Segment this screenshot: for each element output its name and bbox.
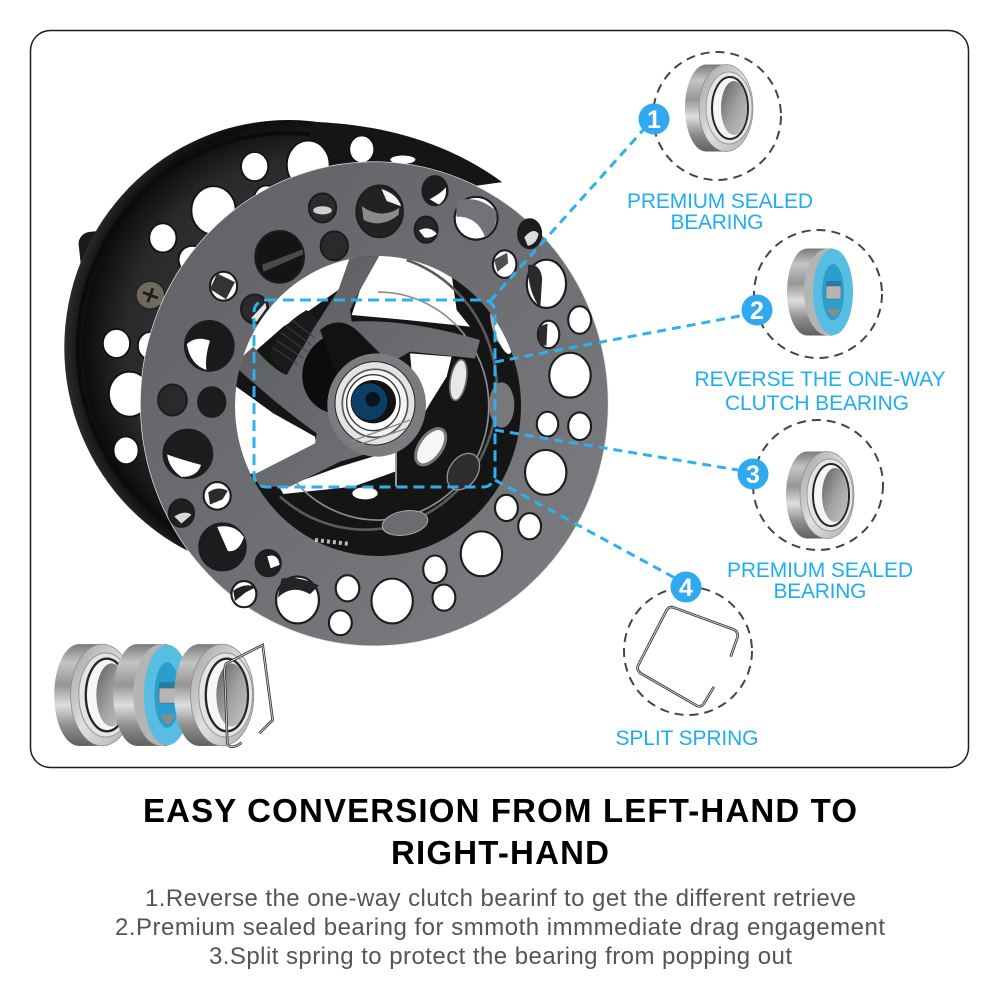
dark shadow around hub: [302, 338, 337, 412]
arrow: line to spring 4: [495, 480, 675, 578]
detail 4: split spring: 4: [679, 574, 693, 602]
description text: 3.Split spring to protect the bearing from popping out: [209, 943, 792, 970]
label: premium sealed bearing: PREMIUM SEALED: [727, 559, 913, 582]
label: bearing: BEARING: [774, 580, 866, 603]
detail 3: premium sealed bearing: [738, 420, 883, 550]
label: premium sealed bearing: PREMIUM SEALED: [627, 190, 813, 213]
title: RIGHT-HAND: [391, 834, 609, 871]
spoke arms: [233, 240, 480, 487]
label: clutch bearing: CLUTCH BEARING: [725, 392, 909, 415]
reel hub and spokes: [235, 256, 521, 556]
detail 4: split spring: [624, 572, 752, 715]
front spool plate: [140, 162, 608, 646]
back spool plate: [64, 120, 513, 575]
knurled knob: [272, 310, 316, 366]
detail 1: premium sealed bearing: 1: [647, 106, 661, 134]
description text: 1.Reverse the one-way clutch bearinf to get the different retrieve: [145, 885, 856, 912]
lower rim studs: [315, 507, 430, 544]
inner opening: [235, 256, 521, 556]
spring-wound bearing: [335, 362, 415, 445]
dashed callout box: [254, 300, 495, 487]
icon: screw: [136, 281, 165, 309]
blue centre: [351, 380, 396, 423]
exploded bearing assembly: [54, 644, 273, 747]
arrow: line to bearing 1: [490, 128, 645, 301]
arrow: line to clutch bearing 2: [495, 315, 745, 362]
detail 3: premium sealed bearing: 3: [746, 461, 760, 489]
rim highlights: [290, 292, 489, 520]
hub ring: [327, 353, 426, 457]
detail 2: reverse one-way clutch bearing: [742, 230, 882, 358]
reel photo: [64, 120, 608, 646]
description text: [115, 885, 885, 970]
see-through detail inside holes: [167, 187, 547, 601]
arrow: line to bearing 3: [495, 430, 738, 470]
label: split spring: SPLIT SPRING: [616, 727, 758, 750]
side lens openings: [448, 358, 468, 402]
title: EASY CONVERSION FROM LEFT-HAND TO: [143, 792, 857, 829]
panel: reel diagram frame: [30, 30, 968, 768]
label: bearing: BEARING: [670, 211, 764, 234]
handle knob: [77, 229, 125, 278]
title: [143, 792, 857, 871]
label: reverse the one-way: REVERSE THE ONE-WAY: [694, 368, 946, 391]
description text: 2.Premium sealed bearing for smmoth immmediate drag engagement: [115, 914, 885, 941]
detail 2: reverse one-way clutch bearing: 2: [750, 297, 764, 325]
detail 1: premium sealed bearing: [638, 52, 781, 180]
